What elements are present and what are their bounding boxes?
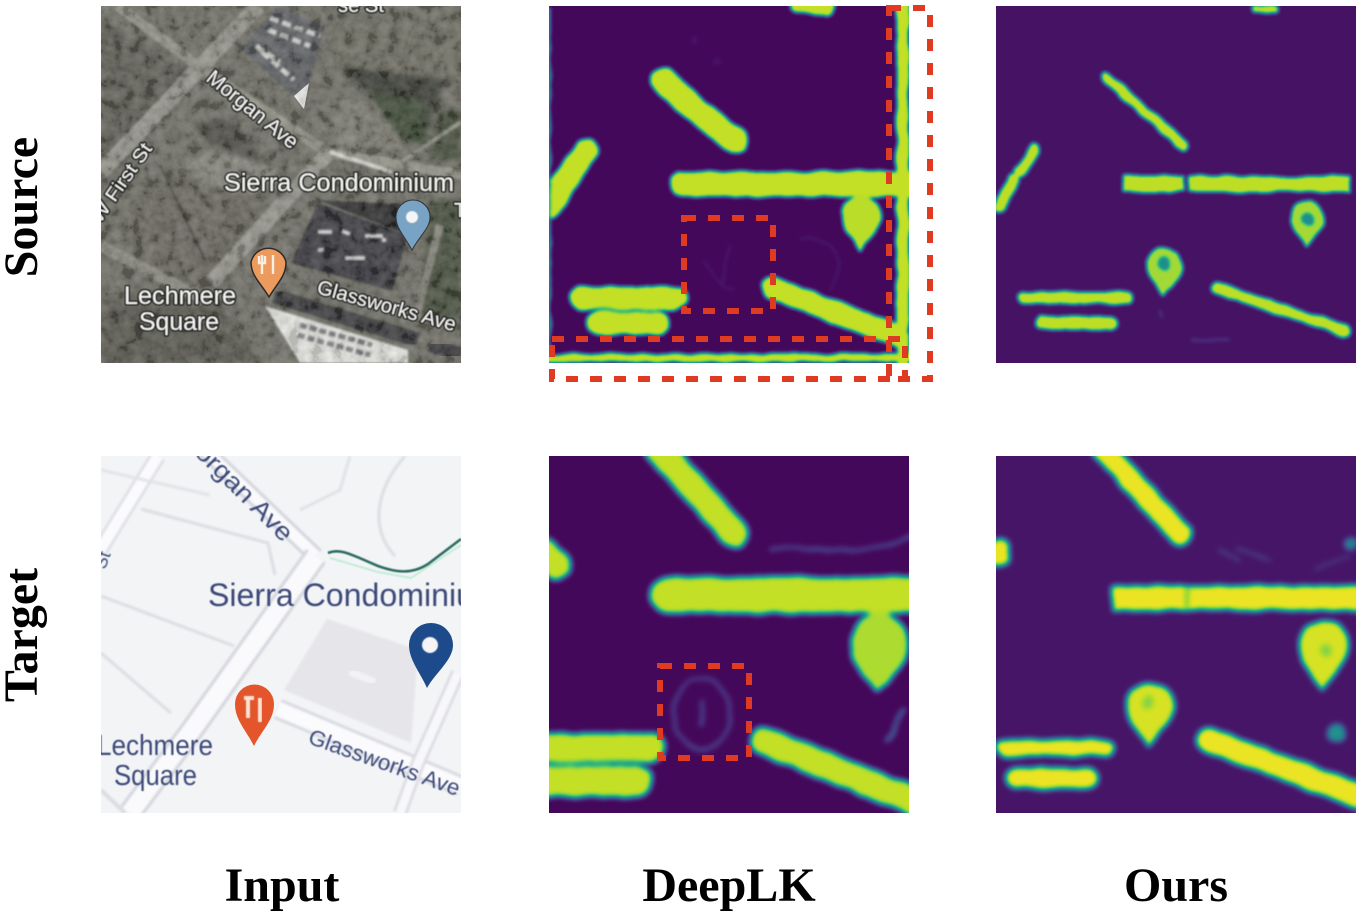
- panel: Ours target heatmap: [996, 456, 1356, 813]
- panel: DeepLK source heatmap: [549, 6, 909, 363]
- map labels: Square: [139, 308, 219, 336]
- map labels: [87, 0, 466, 336]
- panel: DeepLK target heatmap: [549, 456, 909, 813]
- column label: Input: Input: [225, 859, 339, 912]
- map labels: Morgan Ave: [173, 421, 299, 547]
- map labels: Glassworks Ave: [315, 277, 458, 336]
- map labels: Sierra Condominium: [224, 169, 454, 197]
- noise texture: [101, 6, 461, 363]
- building footprint: [284, 619, 418, 743]
- map labels: Square: [114, 760, 197, 792]
- map labels: [101, 456, 461, 796]
- map labels: Sierra Condominiu: [208, 577, 474, 613]
- panel: source satellite input: [87, 0, 470, 363]
- map labels: Lechmere: [97, 730, 213, 762]
- roads as grey casing plus white fill: [100, 456, 158, 550]
- column label: DeepLK: DeepLK: [642, 859, 816, 912]
- building: Sierra Condominium roof: [291, 203, 408, 291]
- icon: blue pin: [396, 200, 430, 250]
- panel: Ours source heatmap: [996, 6, 1356, 363]
- map labels: Glassworks Ave: [305, 724, 464, 801]
- building: warehouse: [242, 7, 323, 97]
- map labels: Lechmere: [124, 282, 236, 310]
- map labels: St: [90, 549, 115, 571]
- panel: target map input: [101, 456, 461, 813]
- map labels: Morgan Ave: [202, 66, 303, 154]
- map labels: W First St: [87, 139, 157, 227]
- callouts: red dashed boxes: [552, 8, 930, 758]
- column label: Ours: Ours: [1124, 859, 1228, 912]
- map labels: T: [454, 200, 466, 222]
- icon: red pin: [235, 685, 274, 746]
- icon: navy pin: [409, 623, 453, 688]
- icon: orange pin: [251, 248, 286, 297]
